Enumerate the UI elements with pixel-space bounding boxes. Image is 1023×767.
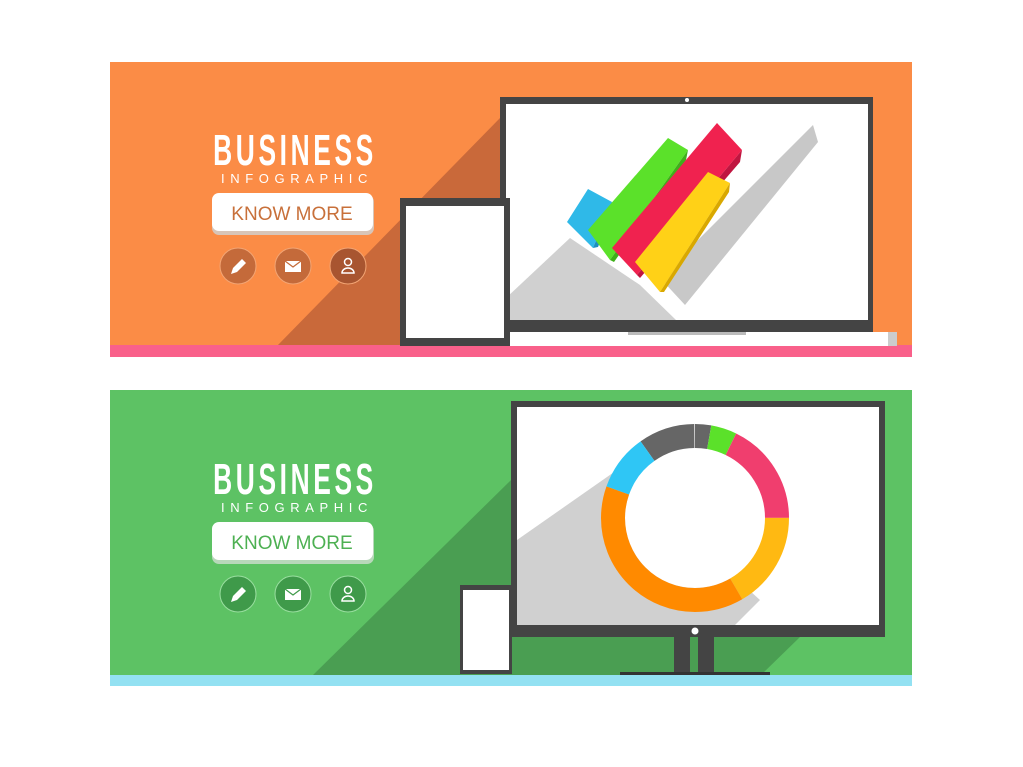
gray bar — [660, 125, 818, 305]
icons: pencil, mail, user — [220, 576, 366, 612]
title: business: BUSINESS — [213, 454, 377, 504]
title: business: BUSINESS — [213, 125, 377, 175]
panel: orange banner — [110, 62, 912, 357]
button: know more: KNOW MORE — [231, 533, 353, 554]
button: know more — [212, 522, 374, 564]
button: know more: KNOW MORE — [231, 204, 353, 225]
chart shadow — [506, 238, 676, 320]
monitor with donut chart — [511, 401, 885, 675]
button: know more — [212, 193, 374, 235]
icons: pencil, mail, user — [220, 248, 366, 284]
donut shadow — [517, 470, 760, 625]
bar: blue — [567, 189, 612, 248]
bar: green — [588, 138, 688, 260]
donut chart — [613, 436, 777, 600]
tablet — [400, 198, 510, 346]
subtitle: INFOGRAPHIC — [221, 171, 373, 186]
laptop with bar chart — [500, 97, 897, 346]
bar: red — [612, 123, 742, 275]
phone — [460, 585, 512, 674]
panel: green banner — [110, 390, 912, 686]
bar: yellow — [635, 172, 730, 292]
subtitle: INFOGRAPHIC — [221, 500, 373, 515]
